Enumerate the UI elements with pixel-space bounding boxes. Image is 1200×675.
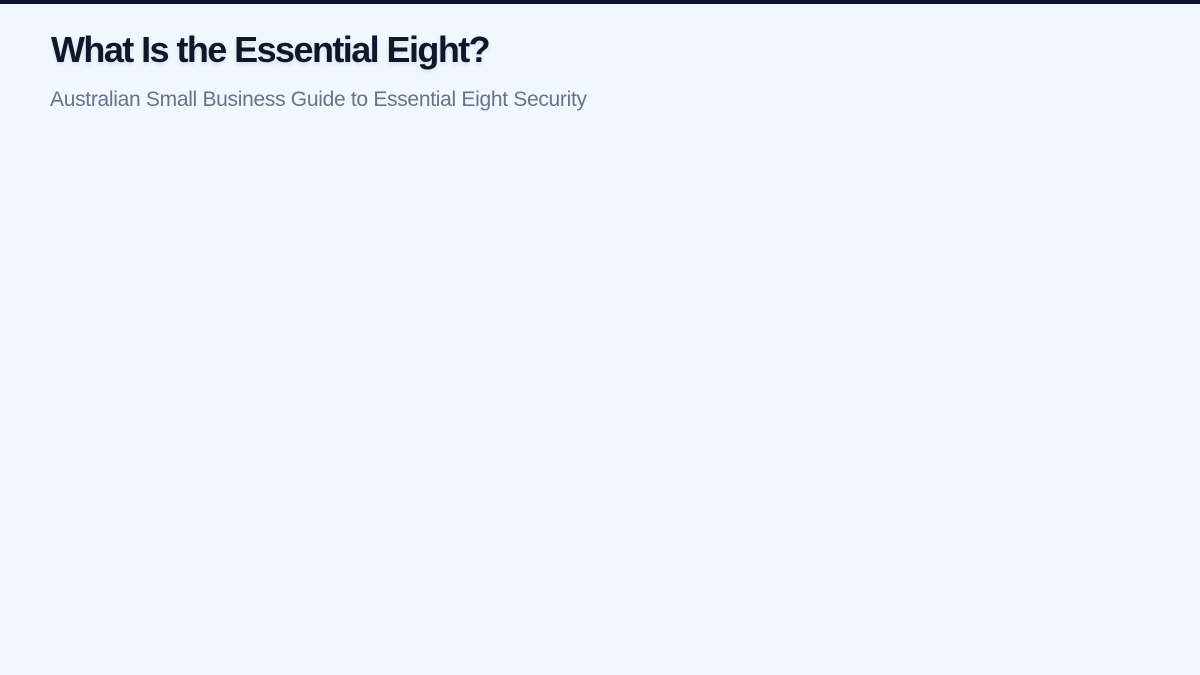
title: What Is the Essential Eight?	[51, 29, 489, 70]
subtitle: Australian Small Business Guide to Essential Eight Security	[50, 88, 587, 111]
top bar	[0, 0, 1200, 4]
